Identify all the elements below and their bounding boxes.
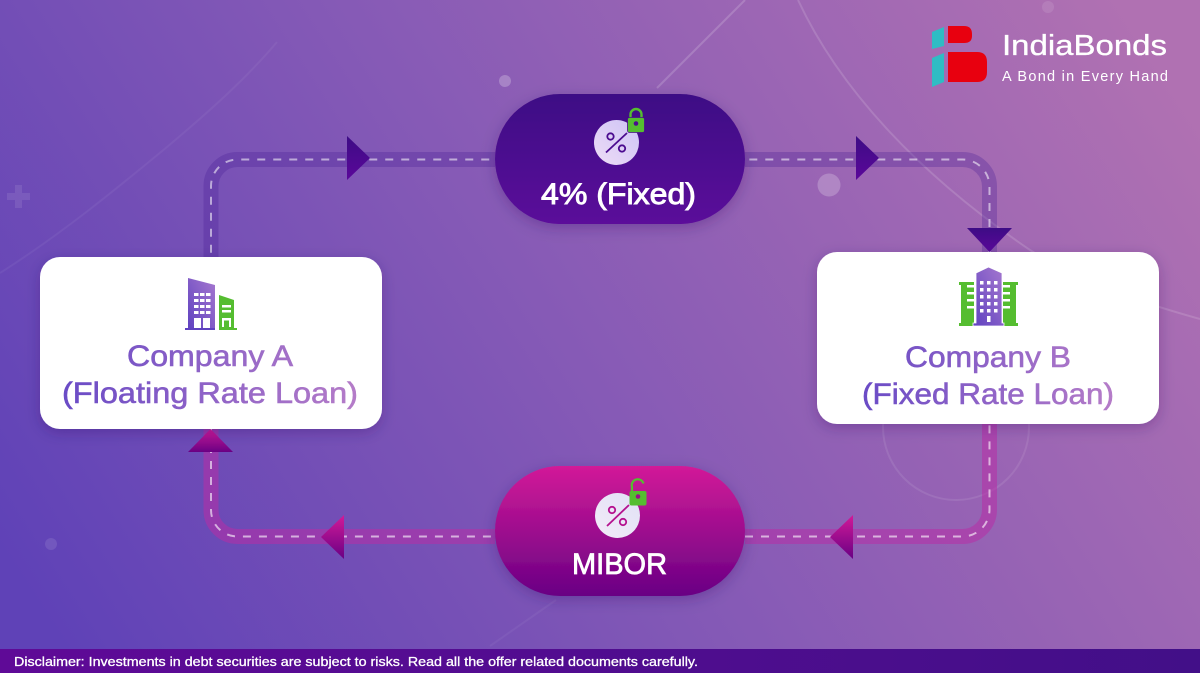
logo tagline: A Bond in Every Hand — [1002, 69, 1168, 85]
arrow: bottom left, pointing left — [321, 515, 344, 559]
label: 4% (Fixed): 4% (Fixed) — [541, 178, 696, 211]
icon: logo mark — [932, 26, 987, 87]
panel: Company B — [817, 252, 1159, 424]
icon: Company B building — [959, 267, 1018, 326]
logo: IndiaBonds — [932, 26, 1168, 87]
arrow: top left, pointing right — [347, 136, 370, 180]
track: fixed payment path — [211, 160, 990, 257]
panel: 4% fixed rate — [495, 94, 745, 224]
label: Company A: Company A — [127, 340, 293, 373]
arrow: into Company A, pointing up — [188, 429, 233, 452]
icon: Company A buildings — [185, 278, 237, 330]
arrow: into Company B, pointing down — [967, 228, 1012, 252]
arrow: bottom right, pointing left — [830, 515, 853, 559]
logo name: IndiaBonds — [1002, 30, 1167, 62]
label: Floating Rate Loan: (Floating Rate Loan) — [62, 377, 358, 410]
label: Company B: Company B — [905, 341, 1071, 374]
disclaimer text: Disclaimer: Investments in debt securities are subject to risks. Read all the offer related documents carefully. — [14, 654, 698, 669]
icon: percent with open lock — [595, 479, 646, 538]
label: Fixed Rate Loan: (Fixed Rate Loan) — [862, 378, 1114, 411]
disclaimer bar — [0, 649, 1200, 673]
track: floating payment path — [211, 424, 990, 536]
panel: Company A — [40, 257, 382, 429]
arrow: top right, pointing right — [856, 136, 879, 180]
panel: MIBOR floating rate — [495, 466, 745, 596]
icon: percent with closed lock — [594, 109, 644, 165]
label: MIBOR: MIBOR — [572, 548, 667, 581]
